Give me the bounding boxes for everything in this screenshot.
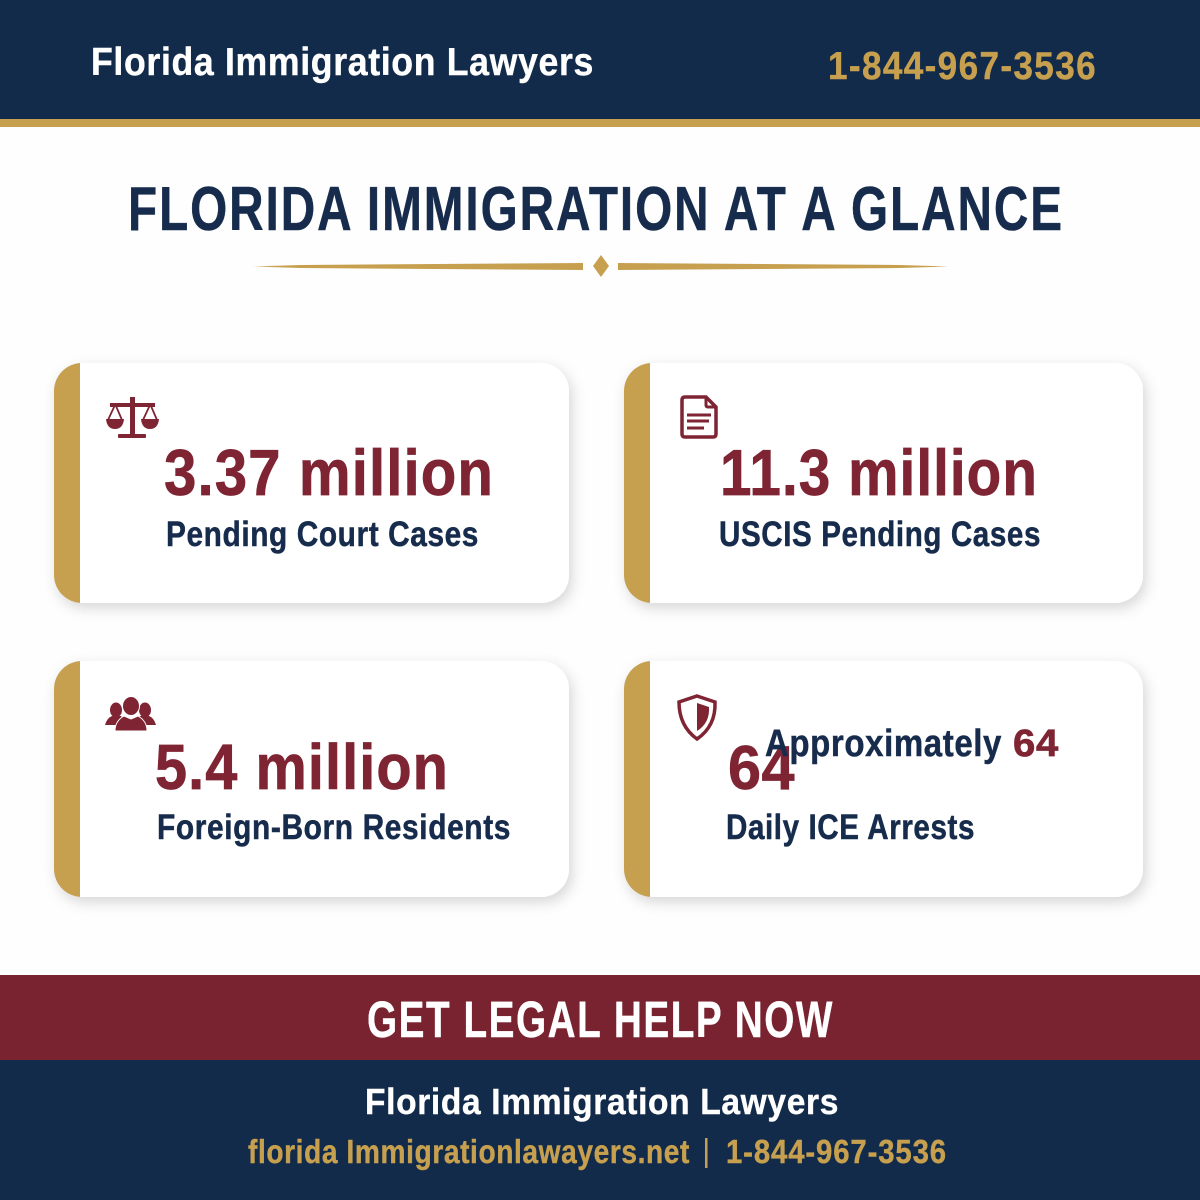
statistic: 3.37 million: 3.37 million — [164, 436, 494, 509]
statistic: 5.4 million: 5.4 million — [155, 731, 449, 803]
overlapping text: approximately: Approximately — [765, 723, 1002, 765]
icon: shield — [679, 696, 715, 739]
header firm name: Florida Immigration Lawyers — [91, 41, 594, 84]
panel: USCIS pending cases — [624, 363, 1143, 603]
label: foreign-born residents: Foreign-Born Residents — [157, 808, 511, 847]
header phone number: 1-844-967-3536 — [828, 45, 1097, 88]
footer phone: 1-844-967-3536 — [726, 1133, 947, 1170]
overlapping text: 64: 64 — [1013, 723, 1059, 765]
label: USCIS pending cases: USCIS Pending Cases — [719, 515, 1041, 554]
label: pending court cases: Pending Court Cases — [166, 515, 479, 554]
call to action banner: GET LEGAL HELP NOW — [367, 991, 834, 1048]
call to action banner — [0, 975, 1200, 1060]
panel: daily ICE arrests — [624, 661, 1143, 897]
icon: document — [682, 397, 716, 437]
statistic: 64: 64 — [728, 734, 795, 803]
footer — [0, 1060, 1200, 1200]
label: daily ICE arrests: Daily ICE Arrests — [726, 808, 975, 847]
statistic: 11.3 million: 11.3 million — [720, 436, 1038, 509]
header band — [0, 0, 1200, 127]
panel: foreign-born residents — [54, 661, 569, 897]
icon: group of people — [105, 696, 156, 731]
footer firm name: Florida Immigration Lawyers — [365, 1081, 839, 1122]
panel: pending court cases — [54, 363, 569, 603]
icon: scales of justice — [106, 397, 159, 438]
title divider — [253, 255, 949, 277]
footer separator — [705, 1138, 708, 1168]
footer website: florida Immigrationlawayers.net — [248, 1133, 690, 1170]
